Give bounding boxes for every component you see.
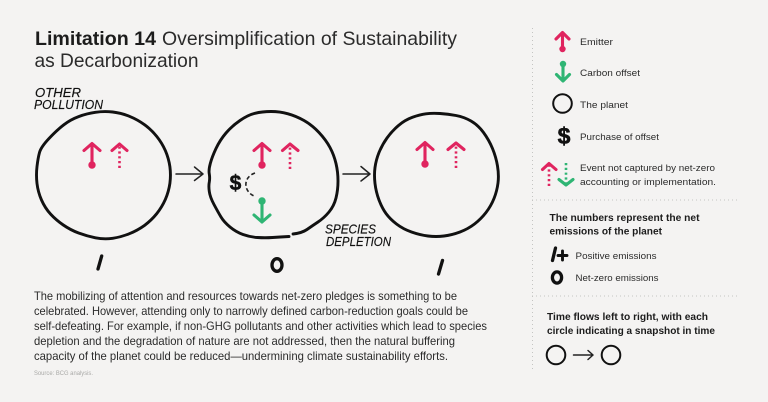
label: other pollution: OTHER [35, 86, 81, 100]
title: as Decarbonization [34, 50, 198, 72]
uncaptured emitter arrow [282, 144, 298, 169]
legend text: emitter: Emitter [580, 37, 614, 48]
net emissions value 1 [438, 260, 442, 274]
uncaptured emitter arrow [448, 143, 464, 168]
emitter arrow [417, 142, 433, 168]
dashed arc [246, 173, 255, 196]
icon: planet [553, 94, 572, 113]
icon: circle [547, 346, 565, 364]
icon: positive [552, 248, 567, 260]
label: other pollution [34, 86, 104, 112]
body text: The mobilizing of attention and resources towards net-zero pledges is something to be [34, 290, 457, 303]
heading: circle indicating a snapshot in time [547, 326, 715, 337]
legend text: event not captured: Event not captured by net-zero [580, 163, 715, 174]
arrow [343, 166, 370, 181]
icon: net-zero [552, 272, 562, 283]
icon: circle [602, 346, 620, 364]
heading [547, 312, 715, 337]
legend text: event not captured: accounting or implementation. [580, 177, 716, 188]
title [34, 28, 457, 72]
legend: symbols [542, 32, 716, 188]
text: net-zero emissions: Net-zero emissions [576, 273, 659, 284]
icon: carbon offset [556, 61, 570, 81]
body text: celebrated. However, attending only to narrowly defined carbon-reduction goals could be [34, 305, 468, 318]
label: other pollution: POLLUTION [34, 98, 104, 112]
legend text: carbon offset: Carbon offset [580, 68, 640, 79]
legend: time [547, 312, 715, 364]
label: species depletion [325, 222, 392, 249]
label: species depletion: DEPLETION [326, 235, 392, 249]
icon: dollar: $ [558, 123, 571, 149]
title: Oversimplification of Sustainability [162, 28, 457, 50]
icon: arrow [574, 350, 593, 360]
emitter arrow [254, 144, 270, 169]
icon: emitter [556, 32, 569, 52]
source: Source: BCG analysis. [34, 371, 93, 377]
label: species depletion: SPECIES [325, 222, 377, 236]
arrow [176, 167, 203, 180]
uncaptured emitter arrow [112, 144, 127, 168]
text: positive emissions: Positive emissions [576, 251, 657, 262]
heading: Time flows left to right, with each [547, 312, 708, 323]
body text: capacity of the planet could be reduced—undermining climate sustainability efforts. [34, 350, 448, 363]
legend text: event not captured [580, 163, 716, 188]
net emissions value 1 [98, 256, 102, 269]
body text [34, 290, 487, 363]
body text: depletion and the degradation of nature are not addressed, then the natural buffering [34, 335, 455, 348]
planet circle 1 [36, 112, 170, 239]
net emissions value 0 [272, 259, 282, 271]
icon: uncaptured event arrows [542, 163, 573, 186]
legend text: the planet: The planet [580, 100, 628, 111]
heading [550, 213, 700, 238]
heading: The numbers represent the net [550, 213, 700, 224]
planet circle 3 [374, 113, 498, 236]
legend: numbers [550, 213, 700, 284]
body text: self-defeating. For example, if non-GHG pollutants and other activities which lead to species [34, 320, 487, 333]
planet circle 2 [209, 112, 338, 238]
dollar sign: $ [230, 172, 242, 195]
heading: emissions of the planet [550, 226, 663, 238]
offset arrow [254, 197, 270, 222]
emitter arrow [84, 144, 100, 169]
title: Limitation 14 [35, 28, 156, 50]
legend text: purchase of offset: Purchase of offset [580, 132, 659, 143]
